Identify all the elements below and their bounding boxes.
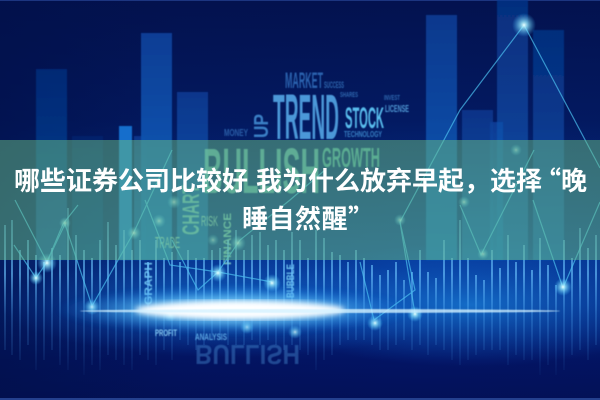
word cloud: INVEST — [384, 95, 400, 102]
word cloud: LICENSE — [385, 104, 409, 115]
word cloud: GRAPH — [143, 262, 155, 305]
word cloud: ANALYSIS — [195, 332, 227, 342]
title: 我为什么放弃早起， — [256, 161, 490, 198]
light flare — [55, 286, 560, 334]
title: 哪些证券公司比较好 — [14, 161, 254, 198]
line chart: zig-zag trend lines and glowing nodes — [14, 13, 600, 339]
word cloud: BUBBLE — [285, 264, 297, 298]
word cloud: TRADE — [155, 235, 180, 252]
word cloud: BULLISH — [195, 339, 300, 370]
word cloud: CHART — [178, 185, 205, 235]
word cloud: GROWTH — [322, 142, 380, 173]
word cloud: TECHNOLOGY — [344, 130, 382, 139]
word cloud: UP — [251, 114, 273, 138]
word cloud: MARKET — [285, 68, 323, 93]
word cloud: TREND — [273, 81, 339, 153]
word cloud: STOCK — [345, 102, 384, 135]
bar chart: background columns — [36, 0, 564, 260]
title — [14, 161, 587, 236]
word cloud: MONEY — [224, 128, 248, 139]
word cloud: PROFIT — [155, 328, 177, 338]
title: 睡自然醒” — [242, 199, 375, 236]
word cloud: RISK — [201, 213, 218, 230]
word cloud: SUCCESS — [324, 80, 344, 90]
title: “ — [535, 161, 561, 198]
word cloud: FINANCE — [222, 213, 234, 265]
word cloud: BULLISH — [203, 135, 320, 207]
wave: audio-style vertical lines — [5, 208, 596, 375]
title: 晚 — [561, 161, 587, 198]
word cloud — [143, 68, 409, 370]
translucent title band — [0, 140, 600, 260]
title: 选择 — [490, 161, 542, 198]
word cloud: SHARES — [340, 92, 358, 99]
